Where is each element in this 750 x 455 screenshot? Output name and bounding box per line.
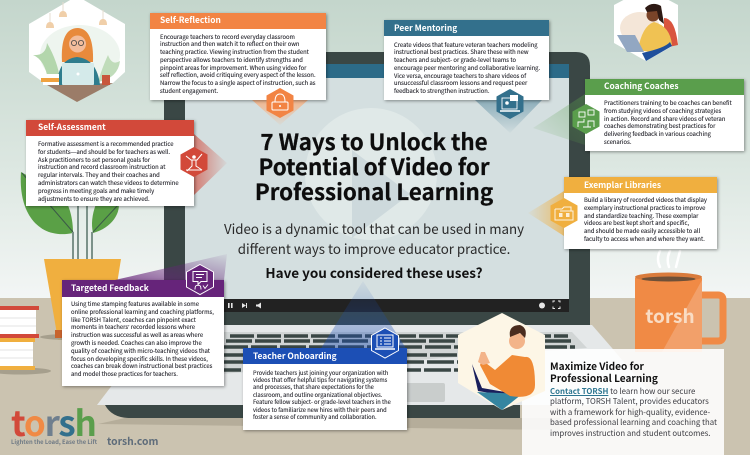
text: Coaching Coaches: in action. Record and share videos of veteran (604, 114, 725, 123)
heading: Maximize Video for Professional Learning: Maximize Video for (550, 358, 644, 373)
text: Targeted Feedback: and model those practices for teachers. (71, 369, 178, 378)
subtitle: different ways to improve educator practice. (238, 239, 510, 258)
logo wordmark: torsh (11, 396, 96, 447)
text: Targeted Feedback: Using time stamping features available in some (71, 299, 199, 308)
heading: Targeted Feedback: Targeted Feedback (71, 282, 149, 294)
illustration: woman at laptop (29, 0, 125, 102)
text: Peer Mentoring: unsuccessful classroom lessons and request peer (394, 78, 527, 87)
text: Self-Reflection: pinpoint areas for improvement. When using video for (160, 63, 306, 72)
heading: Self-Assessment (26, 120, 194, 136)
text: Peer Mentoring (394, 40, 540, 95)
text: Exemplar Libraries (584, 195, 707, 243)
text: Teacher Onboarding: Feature fellow subject- or grade-level teachers in the (253, 397, 391, 406)
title: Professional Learning (255, 175, 493, 207)
text: Targeted Feedback: quality of coaching with micro-teaching videos that (71, 346, 210, 355)
subtitle (224, 219, 524, 258)
text: Self-Reflection: instruction and then watch it to reflect on their own (160, 39, 299, 48)
icon: Peer Mentoring (496, 89, 524, 119)
text: Targeted Feedback: coaches can break down instructional best practices (71, 361, 212, 370)
laptop (97, 52, 660, 430)
text: Teacher Onboarding: foster a sense of community and collaboration. (253, 412, 377, 421)
heading: Exemplar Libraries: Exemplar Libraries (584, 179, 661, 191)
text: Targeted Feedback: focus on developing specific skills. In these videos, (71, 354, 208, 363)
icon: Coaching Coaches (572, 104, 600, 134)
title: Potential of Video for (258, 150, 490, 182)
text: Coaching Coaches: Practitioners training to be coaches can benefit (604, 98, 732, 107)
heading: Self-Assessment: Self-Assessment (38, 121, 106, 133)
books (0, 306, 51, 374)
card: Self-Reflection (150, 13, 326, 100)
text: contact TORSH: improves instruction and student outcomes. (550, 428, 710, 439)
text: Self-Assessment: adjustments to ensure they are achieved. (38, 194, 150, 203)
text: Self-Assessment: Formative assessment is a recommended practice (38, 139, 173, 148)
heading: Teacher Onboarding: Teacher Onboarding (253, 350, 337, 362)
title (255, 125, 493, 207)
text: Teacher Onboarding (253, 368, 391, 421)
text: Self-Reflection: student engagement. (160, 86, 218, 95)
card: Coaching Coaches (585, 79, 744, 151)
text: Peer Mentoring: encourage peer mentoring and collaborative learning. (394, 63, 540, 72)
text: Exemplar Libraries: exemplary instructional practices to improve (584, 203, 705, 212)
question: Have you considered these uses? (265, 262, 483, 282)
heading: Coaching Coaches: Coaching Coaches (604, 80, 679, 92)
heading: Self-Reflection: Self-Reflection (160, 14, 221, 26)
text: contact TORSH (550, 386, 717, 439)
text: Self-Assessment (38, 139, 179, 203)
illustration: man with laptop (458, 313, 545, 410)
heading: Maximize Video for Professional Learning (550, 358, 658, 385)
text: Peer Mentoring: feedback to strengthen instruction. (394, 86, 489, 95)
text: Targeted Feedback: like TORSH Talent, coaches can pinpoint exact (71, 315, 196, 324)
text: Peer Mentoring: teachers and subject- or grade-level teams to (394, 55, 516, 64)
text: Peer Mentoring: Vice versa, encourage teachers to share videos of (394, 71, 526, 80)
mug (635, 251, 723, 352)
icon: Teacher Onboarding (372, 328, 398, 358)
text: Teacher Onboarding: videos to familiarize new hires with their peers and (253, 405, 387, 414)
text: Targeted Feedback: growth is needed. Coaches can also improve the (71, 338, 202, 347)
text: Targeted Feedback: moments in teachers’ recorded lessons where (71, 322, 195, 331)
rays behind icons (115, 94, 585, 350)
text: Self-Assessment: progress in meeting goals and make timely (38, 186, 154, 195)
text: Self-Reflection: teaching practice. Viewing instruction from the student (160, 47, 309, 56)
text: Coaching Coaches (604, 98, 732, 146)
text: Self-Reflection: Encourage teachers to record everyday classroom (160, 32, 295, 40)
text: Peer Mentoring: instructional best practices. Share these with new (394, 47, 529, 56)
icon: Self-Reflection (266, 88, 294, 118)
text: Targeted Feedback: online professional learning and coaching platforms, (71, 307, 214, 316)
text: Exemplar Libraries: and should be made easily accessible to all (584, 226, 700, 235)
text: Targeted Feedback (71, 299, 214, 378)
mug: torsh (645, 302, 695, 329)
heading: Targeted Feedback (62, 280, 224, 296)
text: Teacher Onboarding: Provide teachers just joining your organization with (253, 368, 388, 376)
plant (21, 172, 121, 340)
text: contact TORSH: platform, TORSH Talent, provides educators (550, 396, 709, 407)
heading: Maximize Video for Professional Learning: Professional Learning (550, 370, 658, 385)
text: Exemplar Libraries: and standardize teaching. These exemplar (584, 211, 698, 220)
heading: Self-Reflection (150, 13, 326, 28)
card: Exemplar Libraries (564, 177, 717, 249)
illustration: woman in yellow sweater (614, 0, 678, 61)
subtitle: Video is a dynamic tool that can be used in many (224, 219, 524, 238)
website url: torsh.com (107, 433, 158, 448)
text: Exemplar Libraries: Build a library of recorded videos that display (584, 195, 707, 204)
text: Self-Reflection: self reflection, avoid critiquing every aspect of the lesson. (160, 70, 316, 79)
text: Teacher Onboarding: and processes, that share expectations for the (253, 382, 374, 391)
text: Teacher Onboarding: classroom, and outline organizational objectives. (253, 390, 382, 399)
text: Exemplar Libraries: faculty to access when and where they want. (584, 234, 705, 243)
card: Teacher Onboarding (243, 348, 407, 430)
card: Self-Assessment (26, 120, 194, 206)
text: Self-Assessment: Ask practitioners to set personal goals for (38, 155, 150, 164)
heading: Peer Mentoring: Peer Mentoring (394, 22, 457, 34)
text: contact TORSH: with a framework for high-quality, evidence- (550, 407, 710, 418)
text: Self-Reflection: perspective allows teachers to identify strengths and (160, 55, 303, 64)
text: Coaching Coaches: from studying videos of coaching strategies (604, 106, 721, 115)
icon: Self-Assessment (180, 147, 208, 177)
logo tagline: Lighten the Load, Ease the Lift (11, 436, 97, 446)
icon: Exemplar Libraries (550, 198, 578, 228)
icon: Targeted Feedback (186, 264, 214, 294)
text: Self-Assessment: instruction and record classroom instruction at (38, 162, 165, 171)
heading: Peer Mentoring (384, 20, 549, 36)
card: Peer Mentoring (384, 20, 549, 100)
text: Self-Reflection: Narrow the focus to a single aspect of instruction, such as (160, 78, 315, 87)
text: Self-Assessment: administrators can watch these videos to determine (38, 178, 179, 187)
heading: Teacher Onboarding (243, 348, 407, 364)
text: contact TORSH: based professional learning and coaching that (550, 417, 717, 428)
logo: torsh (11, 396, 97, 447)
text: Exemplar Libraries: videos are best kept short and specific, (584, 218, 689, 227)
heading: Coaching Coaches (585, 79, 744, 94)
title: 7 Ways to Unlock the (260, 125, 488, 157)
text: Targeted Feedback: instruction was successful as well as areas where (71, 330, 203, 339)
text: Peer Mentoring: Create videos that feature veteran teachers modeling (394, 40, 538, 48)
card: Targeted Feedback (62, 280, 224, 386)
text: contact TORSH: Contact TORSH to learn how our secure (550, 386, 695, 397)
text: Self-Assessment: regular intervals. They and their coaches and (38, 170, 160, 179)
panel: Maximize Video (522, 349, 724, 455)
text: Coaching Coaches: coaches demonstrating best practices for (604, 121, 715, 130)
text: Self-Assessment: for students—and should be for teachers as well. (38, 147, 170, 156)
text: Teacher Onboarding: videos that offer helpful tips for navigating systems (253, 375, 387, 384)
text: Coaching Coaches: delivering feedback in various coaching (604, 129, 711, 138)
heading: Exemplar Libraries (564, 177, 717, 193)
text: Coaching Coaches: scenarios. (604, 137, 631, 146)
text: Self-Reflection (160, 32, 316, 95)
